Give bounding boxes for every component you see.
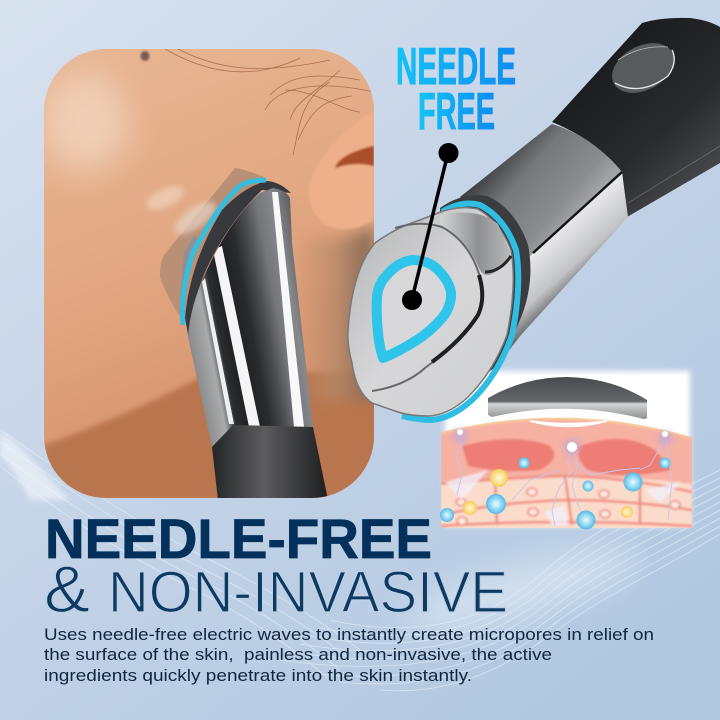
contact crescent	[530, 421, 607, 426]
light arrows	[445, 470, 682, 526]
panel: skin diagram	[440, 371, 693, 530]
cell layer	[441, 476, 692, 530]
wand head reflecting skin	[160, 168, 266, 320]
metal collar	[460, 124, 622, 262]
power button	[604, 33, 682, 103]
neck shadow behind ear	[296, 228, 374, 400]
divider	[533, 172, 622, 253]
pointer line with dots	[402, 143, 458, 310]
silver strip	[497, 172, 628, 366]
cheek sheen	[145, 184, 185, 212]
lightning discharges	[456, 432, 672, 526]
cheek highlight	[41, 72, 129, 172]
upper head reflection	[440, 212, 510, 275]
wand chrome shaft	[188, 188, 313, 447]
device lens	[488, 377, 647, 419]
description text	[44, 625, 654, 685]
dark rim band	[185, 181, 291, 340]
wand product close-up	[348, 18, 720, 420]
cell walls	[441, 476, 692, 526]
glow halos	[452, 428, 673, 456]
head dark reflection	[485, 256, 511, 272]
skin	[44, 49, 374, 498]
callout: needle free label: NEEDLE	[396, 38, 516, 96]
jaw shadow	[44, 372, 380, 500]
molecule bubbles	[440, 458, 670, 530]
heading: non-invasive: NON-INVASIVE	[108, 560, 508, 625]
metal head	[348, 208, 513, 416]
hair strands	[165, 49, 374, 155]
black handle	[552, 18, 720, 217]
description text: ingredients quickly penetrate into the skin instantly.	[44, 666, 472, 685]
small ring cells	[456, 488, 680, 525]
callout: needle free label: FREE	[418, 83, 495, 141]
ear	[309, 110, 374, 229]
heading: needle-free: NEEDLE-FREE	[45, 507, 432, 570]
description text: the surface of the skin, painless and non-invasive, the active	[44, 645, 552, 664]
head highlight	[172, 200, 218, 236]
face contour	[372, 224, 482, 391]
cyan rim	[402, 204, 518, 420]
heading: non-invasive: &	[44, 552, 90, 626]
cyan light ring	[182, 180, 266, 325]
mole	[140, 51, 150, 61]
wand black handle	[212, 425, 328, 500]
dermis red ovals	[462, 439, 554, 471]
inner dark notch	[180, 236, 198, 300]
cyan teardrop	[377, 260, 451, 358]
ear inner shadow	[335, 146, 374, 168]
dark ring	[440, 195, 530, 385]
top epidermis	[441, 417, 692, 436]
handle edge highlight	[628, 146, 720, 203]
white reflections	[272, 192, 304, 427]
panel: photo of wand on cheek	[41, 49, 380, 500]
white backing	[445, 371, 690, 526]
skin layers	[441, 418, 692, 528]
glow points	[457, 429, 668, 452]
callout: needle free label	[396, 38, 516, 141]
description text: Uses needle-free electric waves to instantly create micropores in relief on	[44, 625, 654, 644]
face contour dark	[432, 275, 482, 362]
